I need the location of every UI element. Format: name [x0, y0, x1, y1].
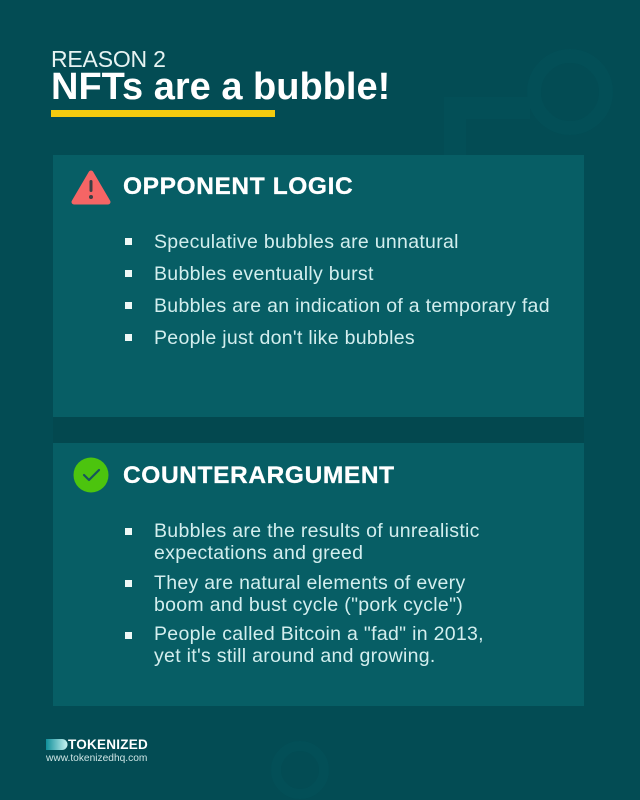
- bullet list: counter points: People called Bitcoin a "fad" in 2013,: [154, 623, 484, 645]
- bullet list: counter points: yet it's still around and growing.: [154, 645, 436, 667]
- bullet list: counter points: expectations and greed: [154, 542, 363, 564]
- logo wordmark: TOKENIZED: [68, 737, 148, 752]
- title: reason label: REASON 2: [51, 46, 166, 72]
- title: main heading: NFTs are a bubble!: [51, 66, 390, 108]
- icon: logo mark: [46, 739, 68, 750]
- bullet list: counter points: They are natural elements of every: [154, 572, 466, 594]
- title underline: [51, 110, 275, 117]
- bullet list: counter points: [125, 520, 484, 667]
- logo: tokenized: [46, 737, 148, 764]
- bullet list: opponent points: Speculative bubbles are unnatural: [154, 231, 459, 253]
- bullet list: opponent points: [125, 231, 550, 349]
- bullet list: opponent points: People just don't like bubbles: [154, 327, 415, 349]
- bullet list: opponent points: Bubbles are an indication of a temporary fad: [154, 295, 550, 317]
- bullet list: opponent points: Bubbles eventually burst: [154, 263, 374, 285]
- panel: counterargument: [53, 443, 584, 706]
- heading: counterargument: COUNTERARGUMENT: [123, 462, 395, 489]
- bullet list: counter points: boom and bust cycle ("pork cycle"): [154, 594, 463, 616]
- bullet list: counter points: Bubbles are the results of unrealistic: [154, 520, 480, 542]
- panel: opponent logic: [53, 155, 584, 417]
- website url: www.tokenizedhq.com: [46, 753, 147, 764]
- heading: opponent logic: OPPONENT LOGIC: [123, 173, 353, 200]
- icon: green check: [74, 458, 108, 492]
- icon: warning triangle: [72, 170, 110, 204]
